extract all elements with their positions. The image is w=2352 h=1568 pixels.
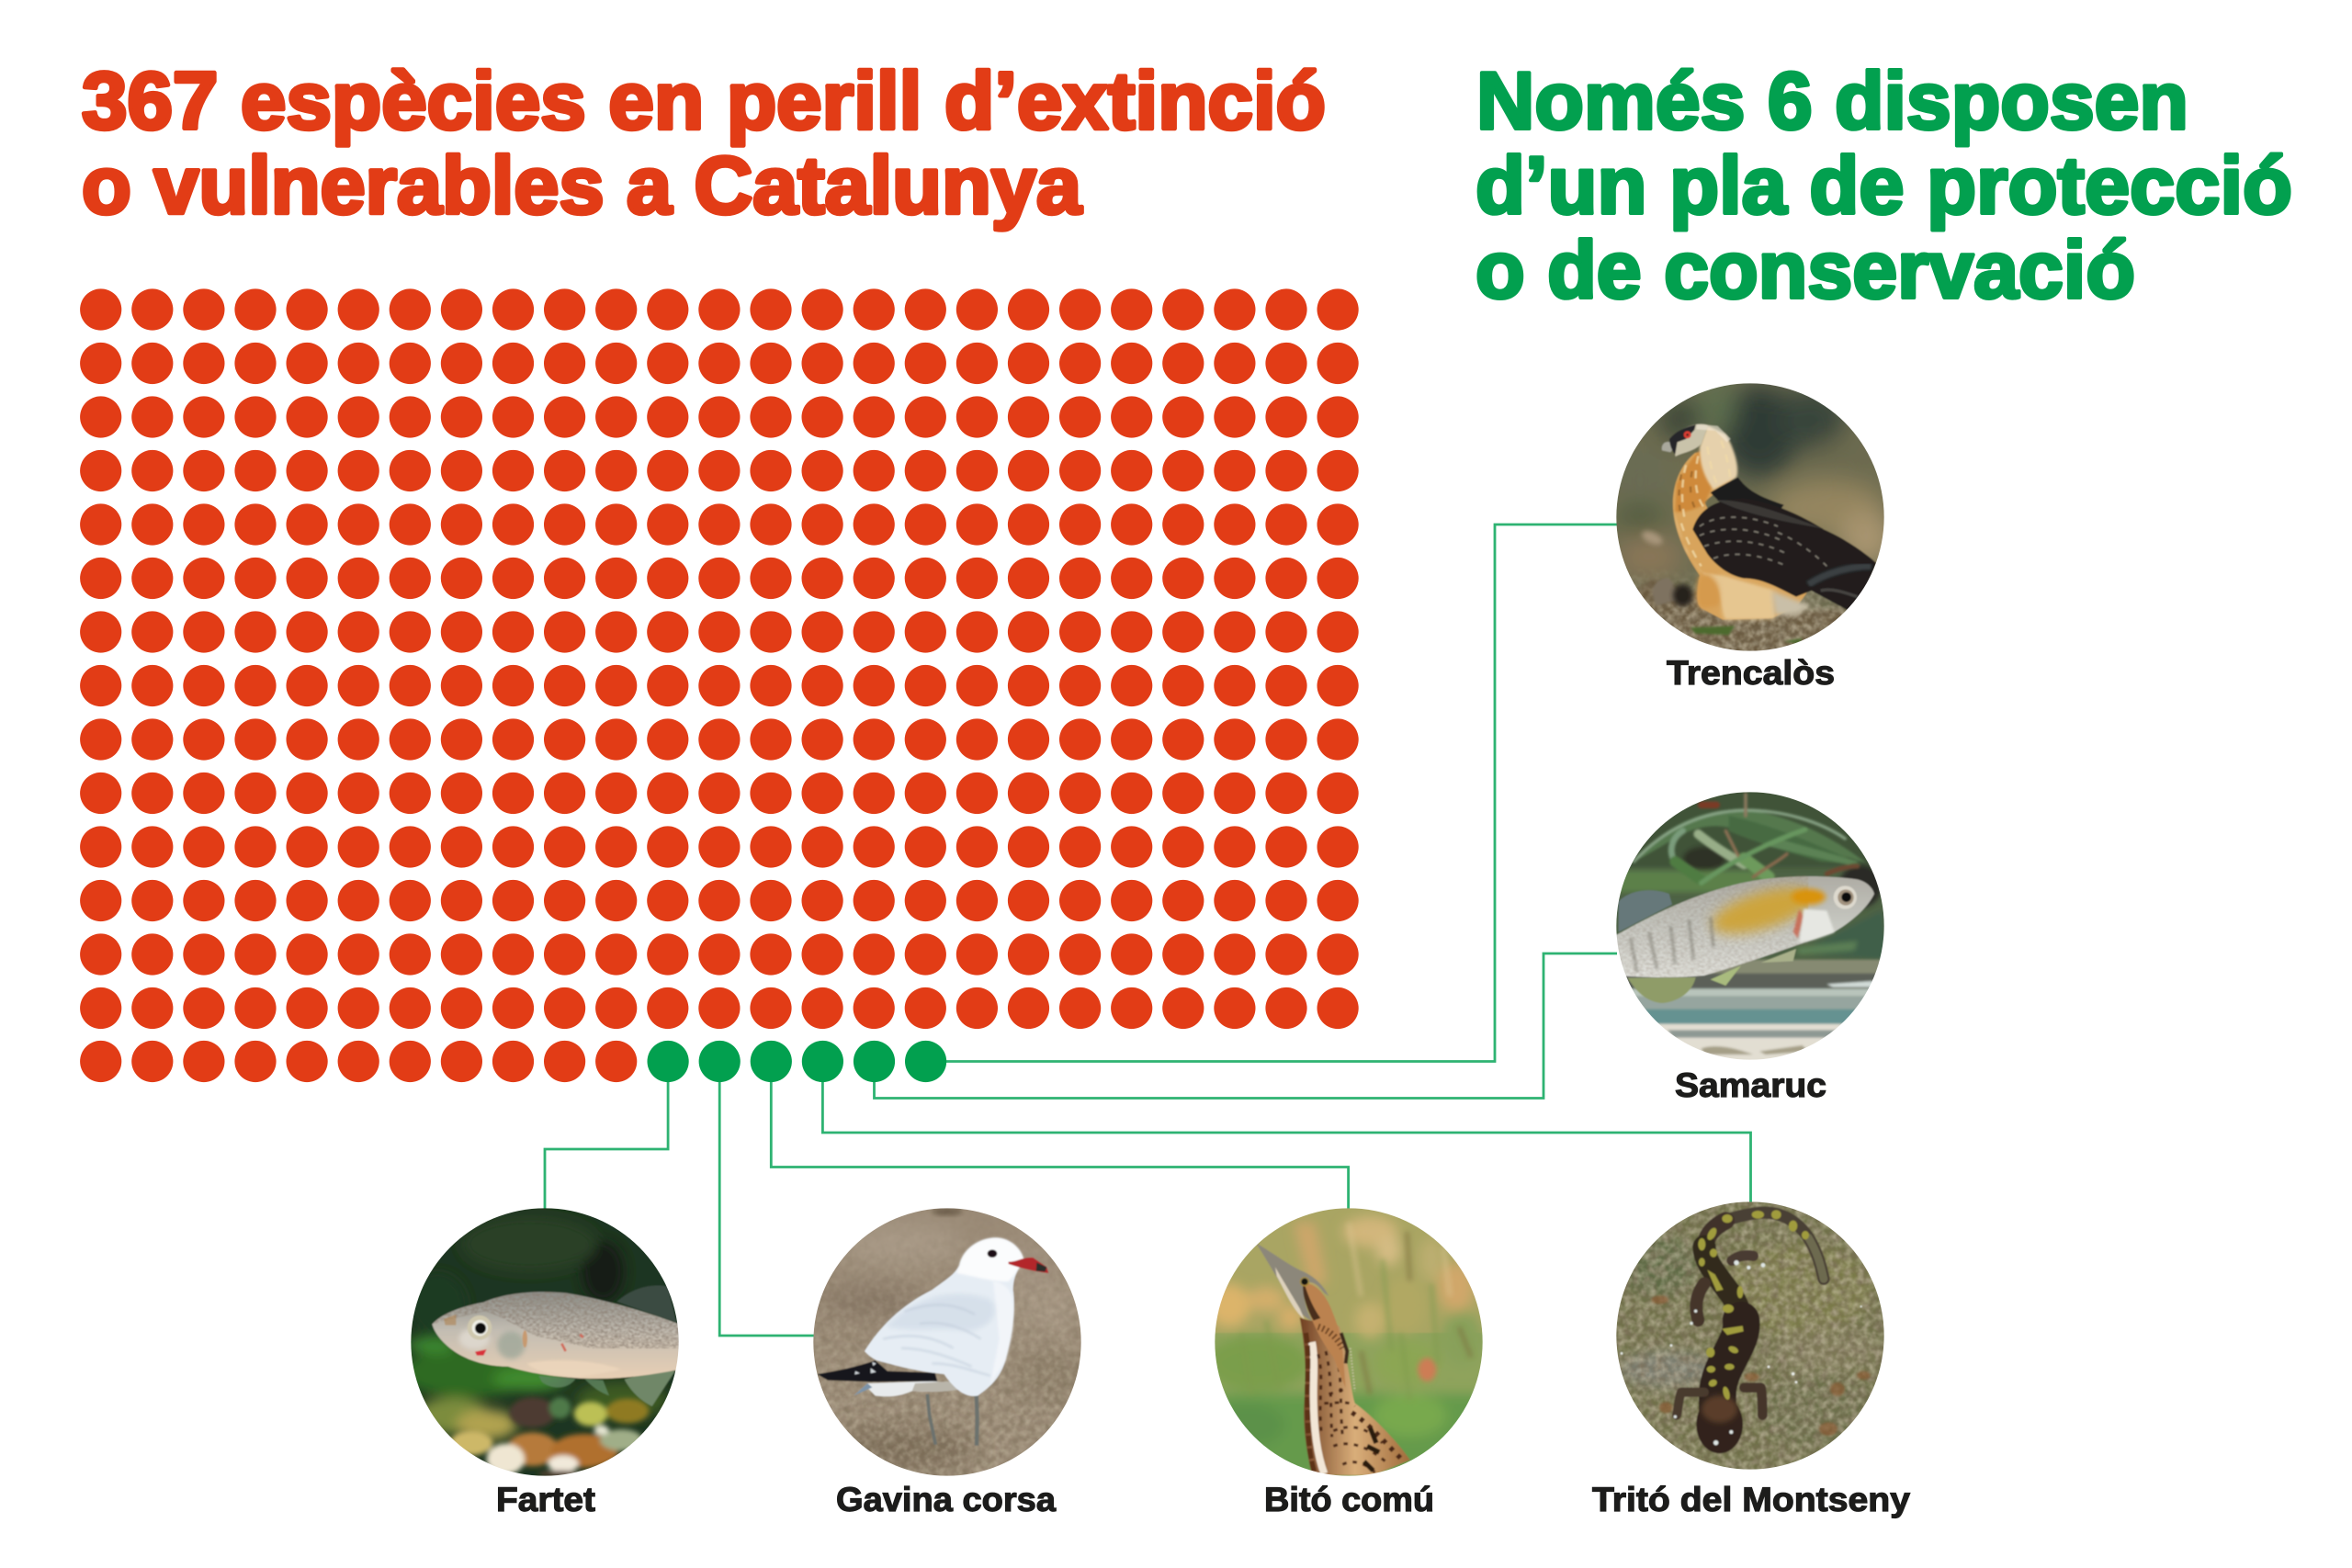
title: red heading: o vulnerables a Catalunya	[82, 140, 1082, 231]
photo: Bitó comú	[1204, 1204, 1487, 1480]
photo: Gavina corsa	[809, 1204, 1085, 1480]
green dots: species with a plan	[647, 1041, 946, 1082]
title: green heading: o de conservació	[1476, 224, 2135, 315]
photo: Samaruc	[1612, 788, 1888, 1064]
connector lines	[545, 525, 1751, 1336]
title: red heading: 367 espècies en perill d’extinció	[82, 55, 1326, 146]
title: red heading	[82, 55, 1326, 231]
label: Trencalòs: Trencalòs	[1667, 654, 1835, 692]
photo: Fartet	[401, 1204, 683, 1480]
photo: Trencalòs	[1612, 379, 1894, 655]
label: Fartet: Fartet	[496, 1481, 595, 1518]
fish	[432, 1286, 683, 1406]
label: Gavina corsa: Gavina corsa	[836, 1481, 1056, 1518]
label: Samaruc: Samaruc	[1675, 1066, 1826, 1104]
chart: dot grid of 367 species	[101, 310, 1751, 1336]
newt	[1677, 1213, 1824, 1434]
photo: Tritó del Montseny	[1612, 1198, 1888, 1473]
red dots: species without a plan	[101, 310, 1339, 1062]
title: green heading: Només 6 disposen	[1476, 55, 2188, 146]
bird	[1662, 424, 1876, 620]
fish	[1612, 874, 1874, 1003]
bird	[817, 1238, 1048, 1446]
label: Bitó comú: Bitó comú	[1264, 1481, 1434, 1518]
label: Tritó del Montseny: Tritó del Montseny	[1592, 1481, 1910, 1518]
bittern	[1256, 1244, 1410, 1475]
title: green heading	[1476, 55, 2292, 315]
water bands	[1626, 958, 1880, 1060]
title: green heading: d’un pla de protecció	[1476, 140, 2292, 231]
